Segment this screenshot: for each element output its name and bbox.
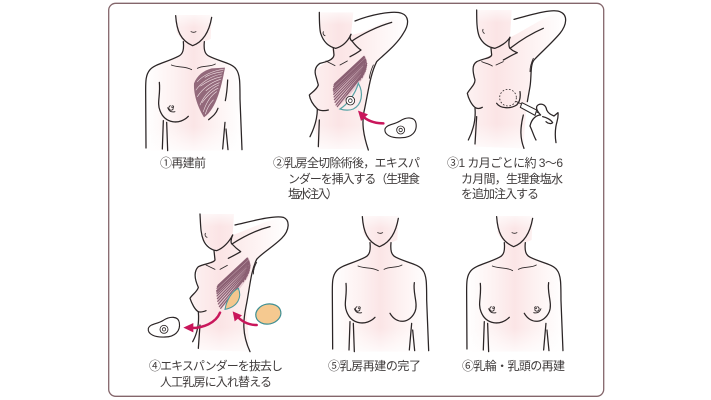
figure 2: expander inserted bbox=[307, 11, 416, 150]
pectoral muscle bbox=[194, 68, 225, 117]
pectoral muscle fan bbox=[217, 257, 250, 309]
reconstructed breast with nipple bbox=[524, 283, 550, 321]
figure 4: swap expander for implant bbox=[148, 213, 292, 353]
caption 3: ③1 カ月ごとに約 3～6 bbox=[447, 155, 563, 170]
figure 6: nipple reconstruction bbox=[464, 215, 564, 353]
caption 4 bbox=[149, 358, 283, 389]
arrow: insertion bbox=[358, 111, 383, 123]
arrow: implant in bbox=[233, 311, 257, 325]
caption 1: ①再建前 bbox=[160, 155, 206, 170]
caption 6: ⑥乳輪・乳頭の再建 bbox=[462, 359, 565, 373]
implanted expander bbox=[340, 83, 361, 110]
raised-arm torso bbox=[188, 213, 292, 353]
raised-arm torso bbox=[307, 11, 410, 150]
raised-arm torso bbox=[465, 9, 568, 149]
dashed injection port circle bbox=[500, 89, 516, 106]
figure 3: saline injection bbox=[465, 9, 568, 149]
pectoral muscle fan bbox=[333, 56, 367, 107]
tissue expander bbox=[385, 118, 416, 138]
caption 3: カ月間，生理食塩水 bbox=[461, 171, 563, 186]
silicone implant bbox=[254, 302, 283, 326]
torso bbox=[464, 215, 564, 353]
figure 5: reconstruction complete bbox=[330, 215, 430, 353]
caption 5: ⑤乳房再建の完了 bbox=[328, 359, 421, 373]
caption 2: 塩水注入） bbox=[288, 186, 338, 201]
syringe and hand bbox=[516, 101, 558, 143]
reconstructed breast bbox=[390, 283, 416, 321]
rounded frame panel bbox=[109, 3, 604, 396]
removed expander bbox=[148, 317, 180, 337]
caption 2 bbox=[273, 155, 420, 201]
caption 3 bbox=[447, 155, 563, 201]
placed implant bbox=[225, 288, 240, 309]
figure 1: before reconstruction bbox=[143, 14, 243, 152]
caption 4: ④エキスパンダーを抜去し bbox=[149, 358, 283, 373]
arrow: expander out bbox=[183, 313, 220, 332]
torso with one breast bbox=[143, 14, 243, 152]
caption 2: ②乳房全切除術後，エキスパ bbox=[273, 155, 420, 170]
caption 4: 人工乳房に入れ替える bbox=[160, 375, 272, 389]
caption 2: ンダーを挿入する（生理食 bbox=[288, 171, 420, 186]
caption 3: を追加注入する bbox=[461, 186, 539, 201]
torso bbox=[330, 215, 430, 353]
